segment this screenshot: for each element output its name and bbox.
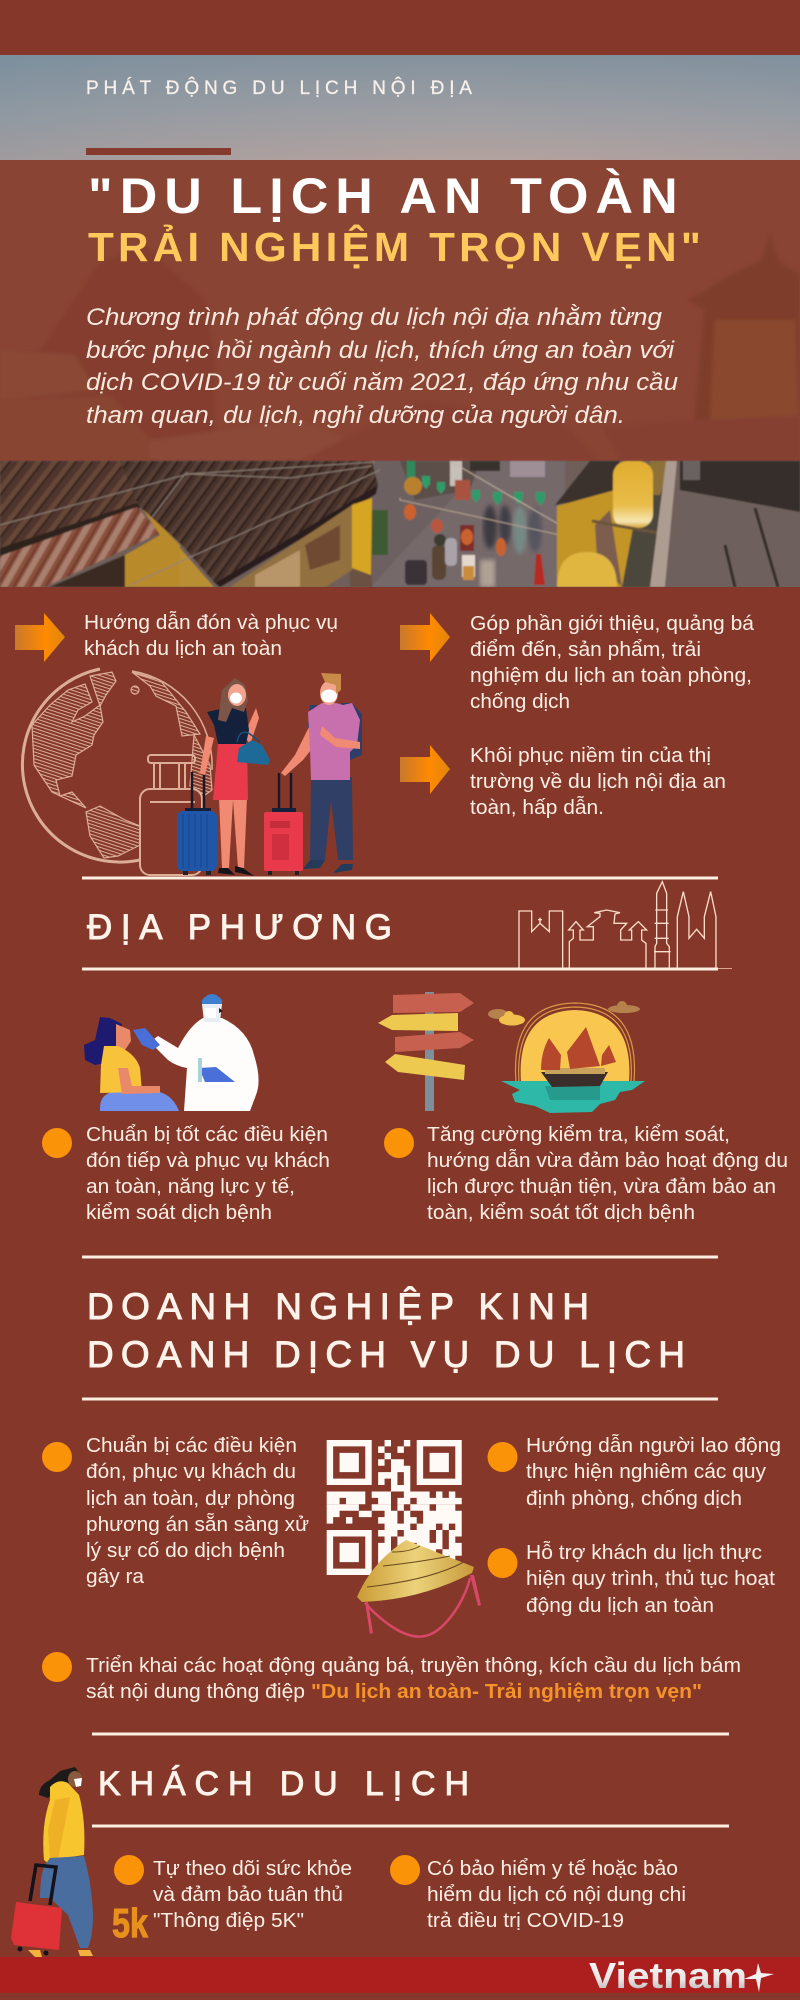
kicker text: PHÁT ĐỘNG DU LỊCH NỘI ĐỊA [86, 77, 472, 99]
icon: 5k mark: 5k [112, 1900, 148, 1946]
text block: hiện quy trình, thủ tục hoạt [526, 1567, 775, 1590]
business item left [42, 1434, 309, 1588]
accent bar [86, 148, 231, 155]
tourist item 1 [114, 1855, 352, 1932]
text block: đón, phục vụ khách du [86, 1460, 296, 1483]
objective text 2: chống dịch [470, 690, 570, 713]
illustration: woman with suitcase [11, 1767, 93, 1958]
objective text 2: nghiệm du lịch an toàn phòng, [470, 664, 752, 687]
text block [526, 1434, 781, 1510]
objective text 1 [84, 611, 338, 660]
text block [86, 1123, 330, 1224]
hero photo: sky [0, 55, 800, 165]
dark roofs and rust awning [0, 461, 140, 555]
blue suitcase [177, 772, 217, 875]
objective text 1: Hướng dẫn đón và phục vụ [84, 611, 338, 634]
text block [153, 1857, 352, 1932]
text block [427, 1123, 788, 1224]
text block: Hỗ trợ khách du lịch thực [526, 1541, 762, 1564]
text block: thực hiện nghiêm các quy [526, 1460, 767, 1483]
bullet [384, 1128, 414, 1158]
text block: Chuẩn bị các điều kiện [86, 1434, 297, 1457]
red suitcase [264, 773, 303, 875]
bullet items: local authorities right [384, 1123, 788, 1224]
top band [0, 0, 800, 55]
heading: tourism businesses: DOANH DỊCH VỤ DU LỊCH [87, 1334, 685, 1375]
divider [92, 1824, 729, 1828]
woman traveller [198, 678, 270, 876]
yellow building and lanterns [555, 461, 620, 505]
bullet [488, 1442, 518, 1472]
bullet [390, 1855, 420, 1885]
bullet [42, 1652, 72, 1682]
stone ledge and wooden deck [650, 461, 677, 587]
text block: sát nội dung thông điệp [86, 1680, 305, 1703]
divider [92, 1732, 729, 1736]
text block: Tự theo dõi sức khỏe [153, 1857, 352, 1880]
text block: gây ra [86, 1565, 145, 1588]
icon: arrow 2 [400, 613, 450, 662]
patient [84, 1017, 179, 1111]
text block: "Du lịch an toàn- Trải nghiệm trọn vẹn" [311, 1680, 702, 1703]
objective text 1: khách du lịch an toàn [84, 637, 282, 660]
text block: lịch an toàn, dự phòng [86, 1487, 295, 1510]
hero photo strip: Hoi An street [0, 461, 800, 587]
icon: arrow 1 [15, 613, 65, 662]
footer band [0, 1957, 800, 1993]
bullet [114, 1855, 144, 1885]
objective text 2: Góp phần giới thiệu, quảng bá [470, 612, 755, 635]
icon: arrow 3 [400, 745, 450, 794]
tourist item 2 [390, 1855, 686, 1932]
text block: "Thông điệp 5K" [153, 1909, 304, 1932]
street and crowd [350, 461, 600, 587]
business item full width [42, 1652, 741, 1703]
text block: an toàn, năng lực y tế, [86, 1175, 295, 1198]
illustration: globe and travellers [22, 669, 362, 876]
divider [82, 1256, 718, 1258]
bullet [42, 1442, 72, 1472]
business item right 1 [488, 1434, 781, 1510]
intro paragraph: tham quan, du lịch, nghỉ dưỡng của người dân. [86, 402, 625, 429]
heading: Địa phương: ĐỊA PHƯƠNG [87, 908, 392, 947]
text block [427, 1857, 686, 1932]
bullet [488, 1548, 518, 1578]
objective text 3: toàn, hấp dẫn. [470, 796, 604, 819]
heading: tourism businesses [87, 1286, 685, 1375]
icon: junk boat at sunset [488, 1001, 645, 1113]
outline suitcase [140, 755, 202, 875]
text block: hiểm du lịch có nội dung chi [427, 1883, 686, 1906]
objective text 3: Khôi phục niềm tin của thị [470, 744, 711, 767]
objective text 3: trường về du lịch nội địa an [470, 770, 726, 793]
text block: kiểm soát dịch bệnh [86, 1201, 272, 1224]
business item right 2 [488, 1541, 775, 1617]
bottom edge below hero photo [0, 587, 800, 601]
text block: Triển khai các hoạt động quảng bá, truyền thông, kích cầu du lịch bám [86, 1654, 741, 1677]
globe [22, 669, 212, 862]
icon: conical hat [357, 1540, 481, 1637]
intro paragraph: bước phục hồi ngành du lịch, thích ứng an toàn với [86, 337, 675, 364]
text block: phương án sẵn sàng xử [86, 1513, 309, 1536]
divider [82, 1398, 718, 1400]
text block: Hướng dẫn người lao động [526, 1434, 781, 1457]
text block: lịch được thuận tiện, vừa đảm bảo an [427, 1175, 776, 1198]
objective text 2: điểm đến, sản phẩm, trải [470, 638, 701, 661]
text block [86, 1654, 741, 1703]
text block [86, 1434, 309, 1588]
intro paragraph: dịch COVID-19 từ cuối năm 2021, đáp ứng nhu cầu [86, 369, 678, 396]
icon: city skyline [519, 882, 716, 968]
text block: định phòng, chống dịch [526, 1487, 742, 1510]
heading: tourists: KHÁCH DU LỊCH [98, 1765, 469, 1803]
text block: hướng dẫn vừa đảm bảo hoạt động du [427, 1149, 788, 1172]
text block: toàn, kiểm soát tốt dịch bệnh [427, 1201, 695, 1224]
text block: đón tiếp và phục vụ khách [86, 1149, 330, 1172]
doctor [133, 994, 259, 1111]
title line 2: TRẢI NGHIỆM TRỌN VẸN" [88, 223, 701, 270]
title line 1: "DU LỊCH AN TOÀN [88, 168, 678, 224]
icon: signpost [378, 992, 474, 1111]
text block: Tăng cường kiểm tra, kiểm soát, [427, 1123, 730, 1146]
bullet items: local authorities [42, 1123, 330, 1224]
man traveller [281, 673, 362, 873]
hero overlay panel with faded buildings [0, 160, 800, 461]
bullet [42, 1128, 72, 1158]
objective text 2 [470, 612, 755, 713]
clouds [488, 1001, 640, 1026]
divider [82, 876, 718, 880]
text block: động du lịch an toàn [526, 1594, 714, 1617]
heading: tourism businesses: DOANH NGHIỆP KINH [87, 1286, 589, 1327]
QR code [327, 1440, 462, 1575]
text block: lý sự cố do dịch bệnh [86, 1539, 285, 1562]
illustration: doctor testing patient [84, 994, 259, 1111]
objective text 3 [470, 744, 726, 819]
panel: objectives [15, 611, 755, 819]
text block: trả điều trị COVID-19 [427, 1909, 624, 1932]
divider [82, 968, 732, 970]
logo: Vietnam+: Vietnam [589, 1955, 747, 1996]
text block: và đảm bảo tuân thủ [153, 1883, 343, 1906]
intro paragraph: Chương trình phát động du lịch nội địa nhằm từng [86, 304, 662, 331]
intro paragraph [86, 304, 678, 429]
text block [526, 1541, 775, 1617]
text block: Có bảo hiểm y tế hoặc bảo [427, 1857, 678, 1880]
text block: Chuẩn bị tốt các điều kiện [86, 1123, 328, 1146]
